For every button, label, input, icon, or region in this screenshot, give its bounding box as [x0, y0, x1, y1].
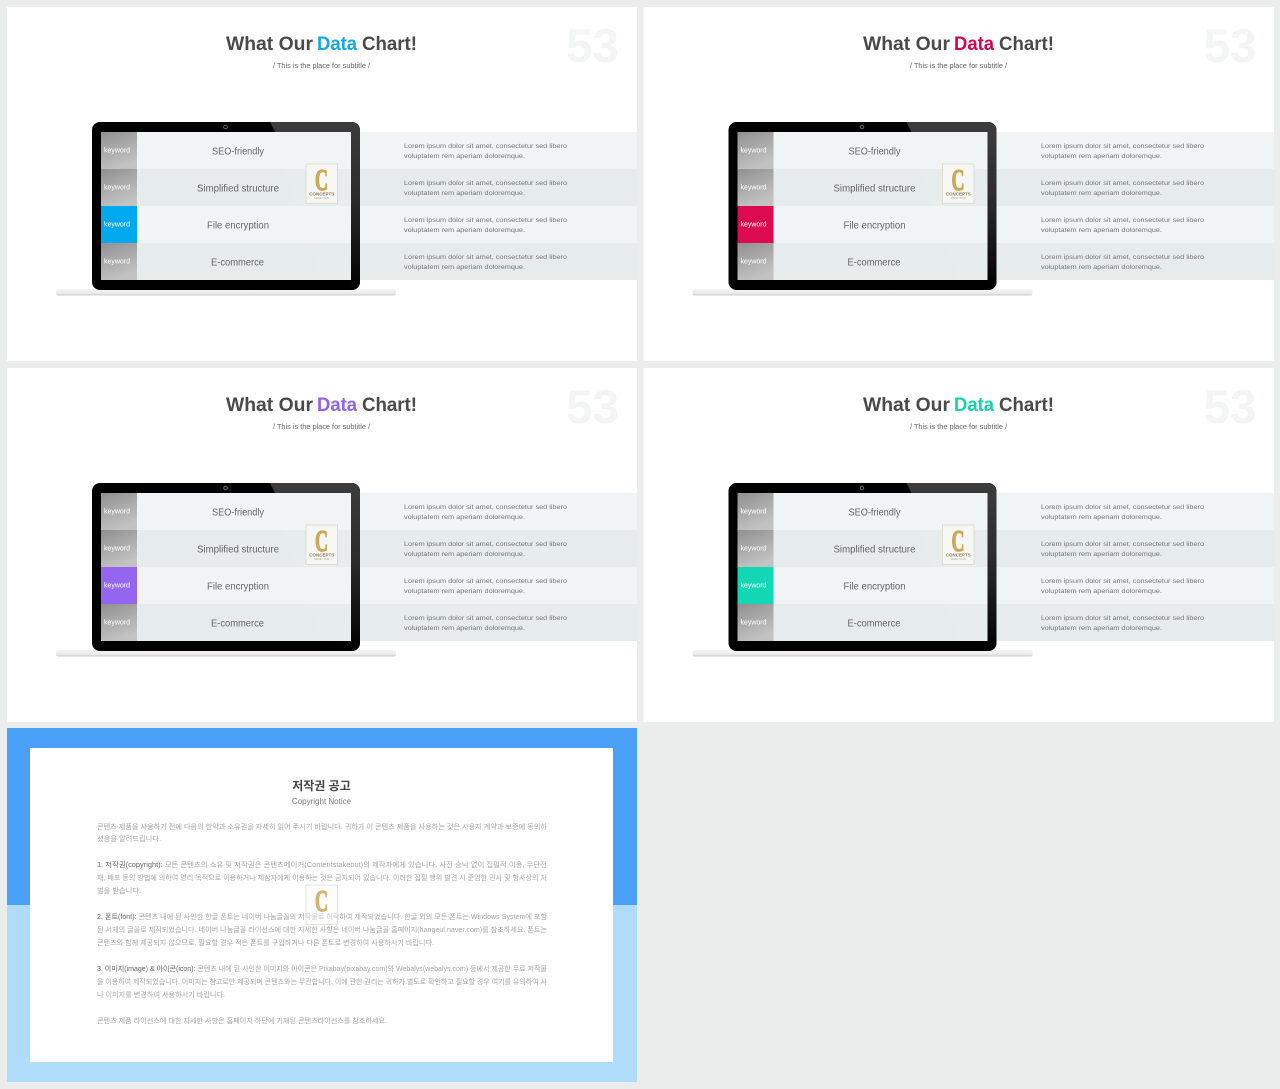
description bands: voluptatem rem aperiam doloremque. [404, 551, 525, 558]
page number: 53 [1204, 19, 1256, 72]
description bands: Lorem ipsum dolor sit amet, consectetur sed libero [1041, 143, 1204, 150]
logo: CONCEPTS [946, 552, 971, 558]
description bands: Lorem ipsum dolor sit amet, consectetur sed libero [404, 180, 567, 187]
logo [306, 162, 338, 204]
logo watermark [306, 883, 338, 924]
description bands: voluptatem rem aperiam doloremque. [1041, 264, 1162, 271]
notice section 2: 콘텐츠의 함께 제공되지 않으므로, 필요할 경우 적은 폰트를 구입하거나 다른 폰트로 변경하여 사용하시기 바랍니다. [97, 938, 434, 947]
logo: CONCEPTS [309, 552, 334, 558]
description bands: voluptatem rem aperiam doloremque. [404, 227, 525, 234]
laptop: SEO-friendly [848, 507, 900, 518]
laptop: keyword [104, 620, 130, 626]
description bands: voluptatem rem aperiam doloremque. [1041, 625, 1162, 632]
description bands [355, 493, 637, 641]
laptop: keyword [740, 620, 767, 626]
laptop: keyword [104, 222, 130, 228]
notice intro [97, 822, 548, 843]
description bands: voluptatem rem aperiam doloremque. [404, 153, 525, 160]
notice section 1: 벌을 받습니다. [97, 886, 141, 895]
logo [306, 523, 338, 564]
logo: MAKE YOUR [314, 558, 329, 561]
title: What Our [226, 34, 314, 55]
description bands: voluptatem rem aperiam doloremque. [1041, 514, 1162, 521]
description bands: voluptatem rem aperiam doloremque. [404, 625, 525, 632]
panel: slide 2 crimson [644, 7, 1274, 361]
description bands: Lorem ipsum dolor sit amet, consectetur sed libero [1041, 180, 1204, 187]
panel: slide 4 teal [644, 368, 1274, 722]
panel: copyright notice [7, 728, 637, 1082]
logo: MAKE YOUR [951, 197, 966, 200]
laptop: E-commerce [848, 618, 901, 629]
logo: C [315, 523, 328, 558]
notice section 3 [97, 964, 548, 999]
laptop: keyword [740, 258, 767, 266]
laptop: keyword [104, 546, 130, 552]
description bands: Lorem ipsum dolor sit amet, consectetur sed libero [1041, 217, 1204, 224]
description bands: voluptatem rem aperiam doloremque. [404, 190, 525, 197]
notice section 3: 나 이미지를 변경하여 사용하시기 바랍니다. [97, 990, 225, 999]
logo [942, 162, 974, 204]
laptop: keyword [104, 184, 130, 192]
title [226, 34, 417, 55]
subtitle: / This is the place for subtitle / [910, 424, 1007, 431]
notice intro: 셨음을 알려드립니다. [97, 834, 161, 843]
title [863, 34, 1054, 55]
laptop: keyword [104, 148, 130, 154]
notice section 1: 재, 배포 등의 방법에 의하여 영리 목적으로 이용하거나 제삼자에게 이용하는 것은 금지되어 있습니다. 이러한 집필 행위 발견 시 준엄한 민사 및 형사상의 처 [97, 873, 547, 882]
title: What Our [863, 395, 951, 416]
laptop: E-commerce [211, 257, 264, 268]
laptop: Simplified structure [197, 544, 279, 555]
laptop [692, 483, 1032, 656]
description bands: Lorem ipsum dolor sit amet, consectetur sed libero [404, 217, 567, 224]
subtitle: / This is the place for subtitle / [910, 63, 1007, 70]
laptop: keyword [104, 582, 130, 590]
description bands: voluptatem rem aperiam doloremque. [1041, 551, 1162, 558]
description bands: voluptatem rem aperiam doloremque. [1041, 227, 1162, 234]
page number: 53 [1204, 380, 1256, 433]
laptop: keyword [740, 222, 767, 228]
logo: C [952, 162, 964, 197]
subtitle: / This is the place for subtitle / [273, 424, 370, 431]
title: Chart! [999, 34, 1054, 55]
logo watermark: C [315, 883, 328, 918]
laptop: keyword [740, 582, 767, 590]
description bands: Lorem ipsum dolor sit amet, consectetur sed libero [404, 615, 567, 622]
description bands: Lorem ipsum dolor sit amet, consectetur sed libero [404, 578, 567, 585]
notice intro: 콘텐츠 제품을 사용하기 전에 다음의 한약과 소유권을 자세히 읽어 주시기 바랍니다. 귀하가 이 콘텐츠 제품을 사용하는 것은 사용자 계약과 보증에 동의하 [97, 822, 548, 831]
notice section 2 [97, 912, 548, 947]
laptop: E-commerce [211, 618, 264, 629]
logo: C [315, 162, 328, 197]
title: Chart! [999, 395, 1054, 416]
page number: 53 [566, 19, 619, 72]
logo [942, 523, 974, 564]
title: Chart! [362, 395, 417, 416]
description bands: Lorem ipsum dolor sit amet, consectetur sed libero [404, 143, 567, 150]
title: Data [954, 34, 994, 55]
page number: 53 [566, 380, 619, 433]
logo: CONCEPTS [946, 192, 971, 196]
notice section 3: 을 이용하여 제작되었습니다. 이미지는 참고로만 제공되며 콘텐츠와는 무관합니다. 이에 관한 권리는 귀하가 별도로 확인하고 필요할 경우 여기를 유의하여 사 [97, 977, 548, 986]
title [863, 395, 1054, 416]
laptop: SEO-friendly [212, 146, 264, 157]
title: Chart! [362, 34, 417, 55]
notice section 2: 된 서체의 글꼴로 제작되었습니다. 네이버 나눔글꼴 라이선스에 대한 자세한 사항은 네이버 나눔글꼴 홈페이지(hangeul.naver.com)를 참조하세요. 폰트는 [97, 925, 548, 934]
logo: CONCEPTS [309, 192, 334, 196]
description bands: voluptatem rem aperiam doloremque. [1041, 588, 1162, 595]
notice section 3: 3. 이미지(image) & 아이콘(icon): 콘텐츠 내에 된 사인한 이미지와 아이콘은 Pixabay(pixabay.com)와 Webalys(webalys.com) 등에서 제공한 무료 저작물 [97, 964, 548, 973]
laptop: keyword [104, 258, 130, 266]
description bands: voluptatem rem aperiam doloremque. [1041, 153, 1162, 160]
laptop: keyword [740, 508, 767, 516]
notice section 1 [97, 860, 547, 895]
description bands: Lorem ipsum dolor sit amet, consectetur sed libero [1041, 615, 1204, 622]
laptop: File encryption [844, 581, 906, 592]
laptop: SEO-friendly [848, 146, 900, 157]
description bands [992, 493, 1274, 641]
description bands: voluptatem rem aperiam doloremque. [404, 588, 525, 595]
description bands: Lorem ipsum dolor sit amet, consectetur sed libero [1041, 504, 1204, 511]
description bands: Lorem ipsum dolor sit amet, consectetur sed libero [404, 541, 567, 548]
laptop: File encryption [207, 581, 269, 592]
laptop: Simplified structure [834, 183, 916, 194]
laptop: keyword [104, 508, 130, 516]
subtitle: / This is the place for subtitle / [273, 63, 370, 70]
title: Data [954, 395, 994, 416]
logo: MAKE YOUR [951, 558, 966, 561]
laptop: keyword [740, 546, 767, 552]
notice footer: 콘텐츠 제품 라이선스에 대한 자세한 사항은 홈페이지 하단에 기재된 콘텐츠라이선스를 참조하세요. [97, 1016, 387, 1025]
laptop [56, 483, 396, 656]
title: Data [317, 34, 357, 55]
title: Data [317, 395, 357, 416]
notice subheading: Copyright Notice [292, 797, 352, 806]
description bands: Lorem ipsum dolor sit amet, consectetur sed libero [404, 254, 567, 261]
laptop [692, 122, 1032, 296]
description bands: Lorem ipsum dolor sit amet, consectetur sed libero [404, 504, 567, 511]
title: What Our [226, 395, 314, 416]
description bands: voluptatem rem aperiam doloremque. [404, 264, 525, 271]
logo: C [952, 523, 964, 558]
description bands: voluptatem rem aperiam doloremque. [1041, 190, 1162, 197]
laptop: File encryption [207, 220, 269, 231]
title [226, 395, 417, 416]
notice section 2: 2. 폰트(font): 콘텐츠 내에 된 사인한 한글 폰트는 네이버 나눔글꼴의 저작물로 허락하여 제작되었습니다. 한글 외의 모든 폰트는 Windows System에 포함 [97, 912, 548, 921]
laptop: File encryption [844, 220, 906, 231]
laptop: Simplified structure [197, 183, 279, 194]
description bands: Lorem ipsum dolor sit amet, consectetur sed libero [1041, 254, 1204, 261]
notice section 1: 1. 저작권(copyright): 모든 콘텐츠의 소유 및 저작권은 콘텐츠메이커(Contentstakeout)의 제작자에게 있습니다. 사전 승낙 없이 집필적 이용, 무단전 [97, 860, 547, 869]
description bands: Lorem ipsum dolor sit amet, consectetur sed libero [1041, 578, 1204, 585]
panel: slide 1 blue [7, 7, 637, 361]
logo: MAKE YOUR [314, 197, 329, 200]
laptop: keyword [740, 148, 767, 154]
description bands [992, 132, 1274, 280]
laptop [56, 122, 396, 296]
laptop: keyword [740, 184, 767, 192]
title: What Our [863, 34, 951, 55]
notice heading: 저작권 공고 [292, 778, 351, 793]
laptop: Simplified structure [834, 544, 916, 555]
description bands [355, 132, 637, 280]
description bands: voluptatem rem aperiam doloremque. [404, 514, 525, 521]
laptop: SEO-friendly [212, 507, 264, 518]
description bands: Lorem ipsum dolor sit amet, consectetur sed libero [1041, 541, 1204, 548]
laptop: E-commerce [848, 257, 901, 268]
panel: slide 3 purple [7, 368, 637, 722]
